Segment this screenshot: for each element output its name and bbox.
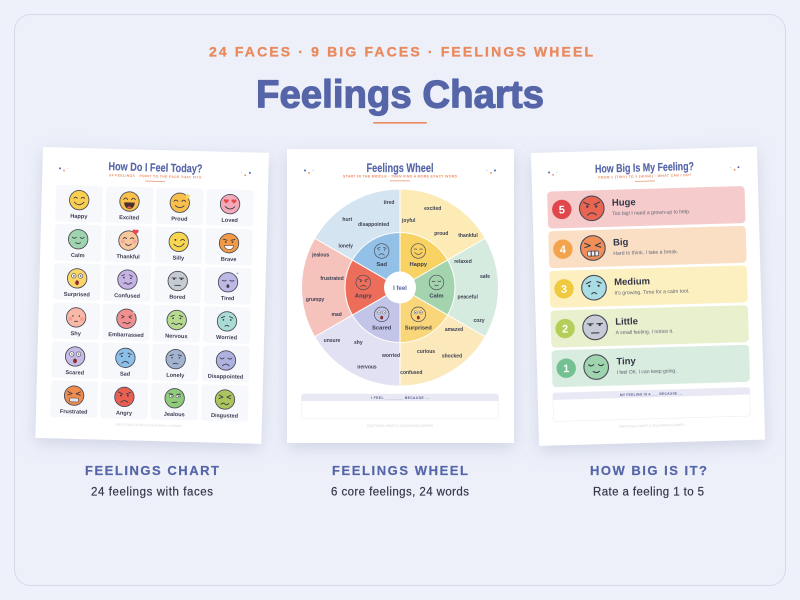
cell: Jealous: Jealous	[164, 412, 185, 418]
outer feeling words: shocked	[442, 354, 462, 360]
outer feeling words: confused	[400, 370, 422, 376]
cell: Angry	[100, 382, 148, 419]
outer feeling words: curious	[417, 349, 435, 355]
outer feeling words: proud	[434, 231, 448, 237]
cell: Thankful: Thankful	[116, 254, 140, 261]
panel: feelings chart sheet	[35, 147, 269, 444]
row: 1 Tiny	[552, 345, 750, 387]
cell: Loved	[206, 189, 254, 227]
row: 1 Tiny: I feel OK. I can keep going.	[617, 368, 677, 376]
outer feeling words	[306, 200, 490, 376]
row: 5 Huge	[547, 186, 746, 229]
core: Calm	[429, 275, 444, 300]
cell: Angry: Angry	[116, 410, 133, 417]
outer feeling words: safe	[480, 274, 490, 280]
sheet footer: EMOTIONAL HEART & CALM BRAIN CORNER	[116, 423, 182, 428]
center label	[384, 272, 416, 304]
row: 3 Medium	[549, 265, 748, 308]
row: 5 Huge: Too big! I need a grown-up to help.	[612, 209, 690, 217]
row: 4 Big	[548, 226, 747, 268]
cell: Jealous	[151, 383, 199, 421]
core: Sad: Sad	[376, 262, 387, 268]
cell: Loved: Loved	[221, 218, 239, 224]
outer feeling words: frustrated	[320, 276, 344, 282]
outer feeling words: jealous	[311, 252, 330, 258]
sheet subheading: FROM 1 (TINY) TO 5 (HUGE) · WHAT CAN I DO?	[598, 173, 691, 180]
outer feeling words: amazed	[445, 327, 463, 333]
core: Surprised: Surprised	[405, 325, 432, 331]
core: Surprised	[405, 307, 432, 331]
cell: Nervous: Nervous	[165, 334, 188, 340]
outer feeling words: tired	[384, 200, 394, 206]
cell: Disgusted: Disgusted	[211, 413, 239, 420]
cell: Surprised: Surprised	[64, 292, 90, 298]
cell: Shy: Shy	[71, 331, 82, 337]
outer feeling words: mad	[332, 312, 342, 318]
core: Scared	[372, 307, 392, 331]
row: 2 Little: A small feeling. I notice it.	[615, 329, 674, 336]
cell: Worried	[203, 306, 251, 344]
caption: feelings wheel: 6 core feelings, 24 words	[331, 486, 469, 498]
row: 4 Big: Big	[613, 237, 629, 248]
caption: feelings chart	[85, 463, 219, 498]
core: Scared: Scared	[372, 325, 392, 331]
cell: Calm: Calm	[71, 253, 85, 259]
sheet footer: EMOTIONAL HEART & CALM BRAIN CORNER	[619, 423, 685, 429]
row: 3 Medium: 3	[561, 284, 567, 296]
cell: Disgusted	[201, 384, 249, 422]
outer feeling words: disappointed	[358, 222, 389, 228]
row: 3 Medium: It's growing. Time for a calm tool.	[614, 289, 690, 297]
cell: Proud: Proud	[171, 216, 188, 223]
row: 5 Huge: 5	[559, 204, 565, 217]
cell: Silly: Silly	[172, 256, 185, 262]
cell: Confused	[103, 264, 151, 302]
cell: Bored	[154, 266, 202, 303]
outer feeling words: nervous	[357, 364, 377, 370]
outer feeling words: thankful	[458, 233, 478, 239]
title underline	[373, 122, 427, 124]
caption: feelings wheel: FEELINGS WHEEL	[332, 463, 468, 478]
cell: Frustrated: Frustrated	[60, 409, 88, 416]
cell: Brave	[205, 228, 253, 266]
cell: Tired: Tired	[221, 296, 235, 302]
row: 4 Big: Hard to think. I take a break.	[613, 249, 678, 257]
cell: Scared: Scared	[65, 370, 85, 377]
cell: Embarrassed	[102, 303, 150, 341]
caption: how big is it: HOW BIG IS IT?	[590, 463, 707, 478]
caption: feelings chart: 24 feelings with faces	[91, 486, 213, 498]
row: 5 Huge: Huge	[612, 197, 636, 209]
sheet heading: How Big Is My Feeling?	[595, 161, 694, 176]
cell: Happy: Happy	[70, 214, 88, 220]
cell: Lonely	[152, 344, 200, 382]
center label: I feel	[393, 286, 407, 292]
cell: Frustrated	[50, 380, 98, 418]
cell: Tired	[204, 267, 252, 305]
caption: how big is it: Rate a feeling 1 to 5	[593, 486, 704, 498]
row: 1 Tiny: Tiny	[616, 356, 637, 367]
outer feeling words: worried	[381, 353, 400, 359]
cell: Surprised	[53, 263, 101, 301]
cell: Silly	[155, 227, 203, 264]
outer feeling words: joyful	[401, 218, 416, 224]
feelings wheel chart	[302, 189, 498, 386]
outer feeling words: relaxed	[454, 259, 472, 265]
core: Sad	[374, 244, 389, 268]
core: Angry	[355, 275, 372, 300]
write-in box	[553, 387, 750, 421]
cell: Proud	[156, 187, 204, 225]
cell: Disappointed	[202, 345, 250, 383]
sheet footer: EMOTIONAL HEART & CALM BRAIN CORNER	[367, 424, 434, 428]
caption: feelings chart: FEELINGS CHART	[85, 463, 219, 478]
cell: Excited	[105, 186, 153, 224]
row: 2 Little	[550, 305, 749, 348]
sheet subheading: 24 FEELINGS · POINT TO THE FACE THAT FITS	[109, 173, 202, 180]
core: Happy: Happy	[409, 262, 428, 268]
row: 1 Tiny: 1	[563, 363, 569, 375]
title: Feelings Charts	[256, 74, 544, 116]
cell: Sad: Sad	[120, 371, 131, 378]
outer feeling words: hurt	[342, 217, 352, 223]
outer feeling words: excited	[424, 206, 441, 212]
cell: Lonely: Lonely	[166, 373, 185, 379]
row: 2 Little: Little	[615, 316, 638, 328]
cell: Thankful	[104, 225, 152, 263]
sheet heading: How Do I Feel Today?	[108, 161, 203, 176]
core: Happy	[409, 244, 428, 268]
cell: Confused: Confused	[114, 293, 141, 300]
row: 3 Medium: Medium	[614, 276, 650, 288]
cell: Calm	[54, 224, 102, 262]
outer feeling words: grumpy	[306, 297, 324, 303]
cell: Scared	[51, 341, 99, 379]
outer feeling words: lonely	[338, 244, 353, 250]
cell: Bored: Bored	[169, 295, 186, 301]
sheet heading: Feelings Wheel	[366, 163, 434, 175]
panel: feelings wheel sheet	[287, 149, 514, 443]
outer feeling words: unsure	[324, 338, 341, 344]
row: 2 Little: 2	[562, 323, 568, 336]
outer feeling words: shy	[354, 340, 363, 346]
outer feeling words: peaceful	[458, 294, 478, 300]
sheet subheading: START IN THE MIDDLE · THEN FIND A MORE EXACT WORD	[343, 174, 458, 178]
cell: Embarrassed: Embarrassed	[108, 332, 144, 339]
row: 4 Big: 4	[560, 244, 567, 256]
cell: Shy	[52, 302, 100, 340]
cell: Nervous	[153, 305, 201, 342]
cell: Brave: Brave	[221, 257, 236, 263]
core: Angry: Angry	[355, 294, 372, 300]
write-in box: MY FEELING IS A ___ BECAUSE ...	[620, 391, 682, 397]
cell: Happy	[55, 185, 103, 223]
core: Calm: Calm	[429, 294, 444, 300]
outer feeling words: cozy	[473, 318, 485, 324]
caption: how big is it	[590, 463, 707, 498]
caption: feelings wheel	[331, 463, 469, 498]
cell: Disappointed: Disappointed	[208, 374, 244, 381]
cell: Sad	[101, 343, 149, 380]
eyebrow text: 24 FACES · 9 BIG FACES · FEELINGS WHEEL	[209, 44, 593, 60]
write-in box: I FEEL ________ BECAUSE ...	[371, 396, 429, 400]
write-in box	[302, 394, 498, 418]
cell: Excited: Excited	[119, 215, 140, 222]
panel: how big is it sheet	[531, 147, 765, 446]
cell: Worried: Worried	[216, 335, 238, 341]
